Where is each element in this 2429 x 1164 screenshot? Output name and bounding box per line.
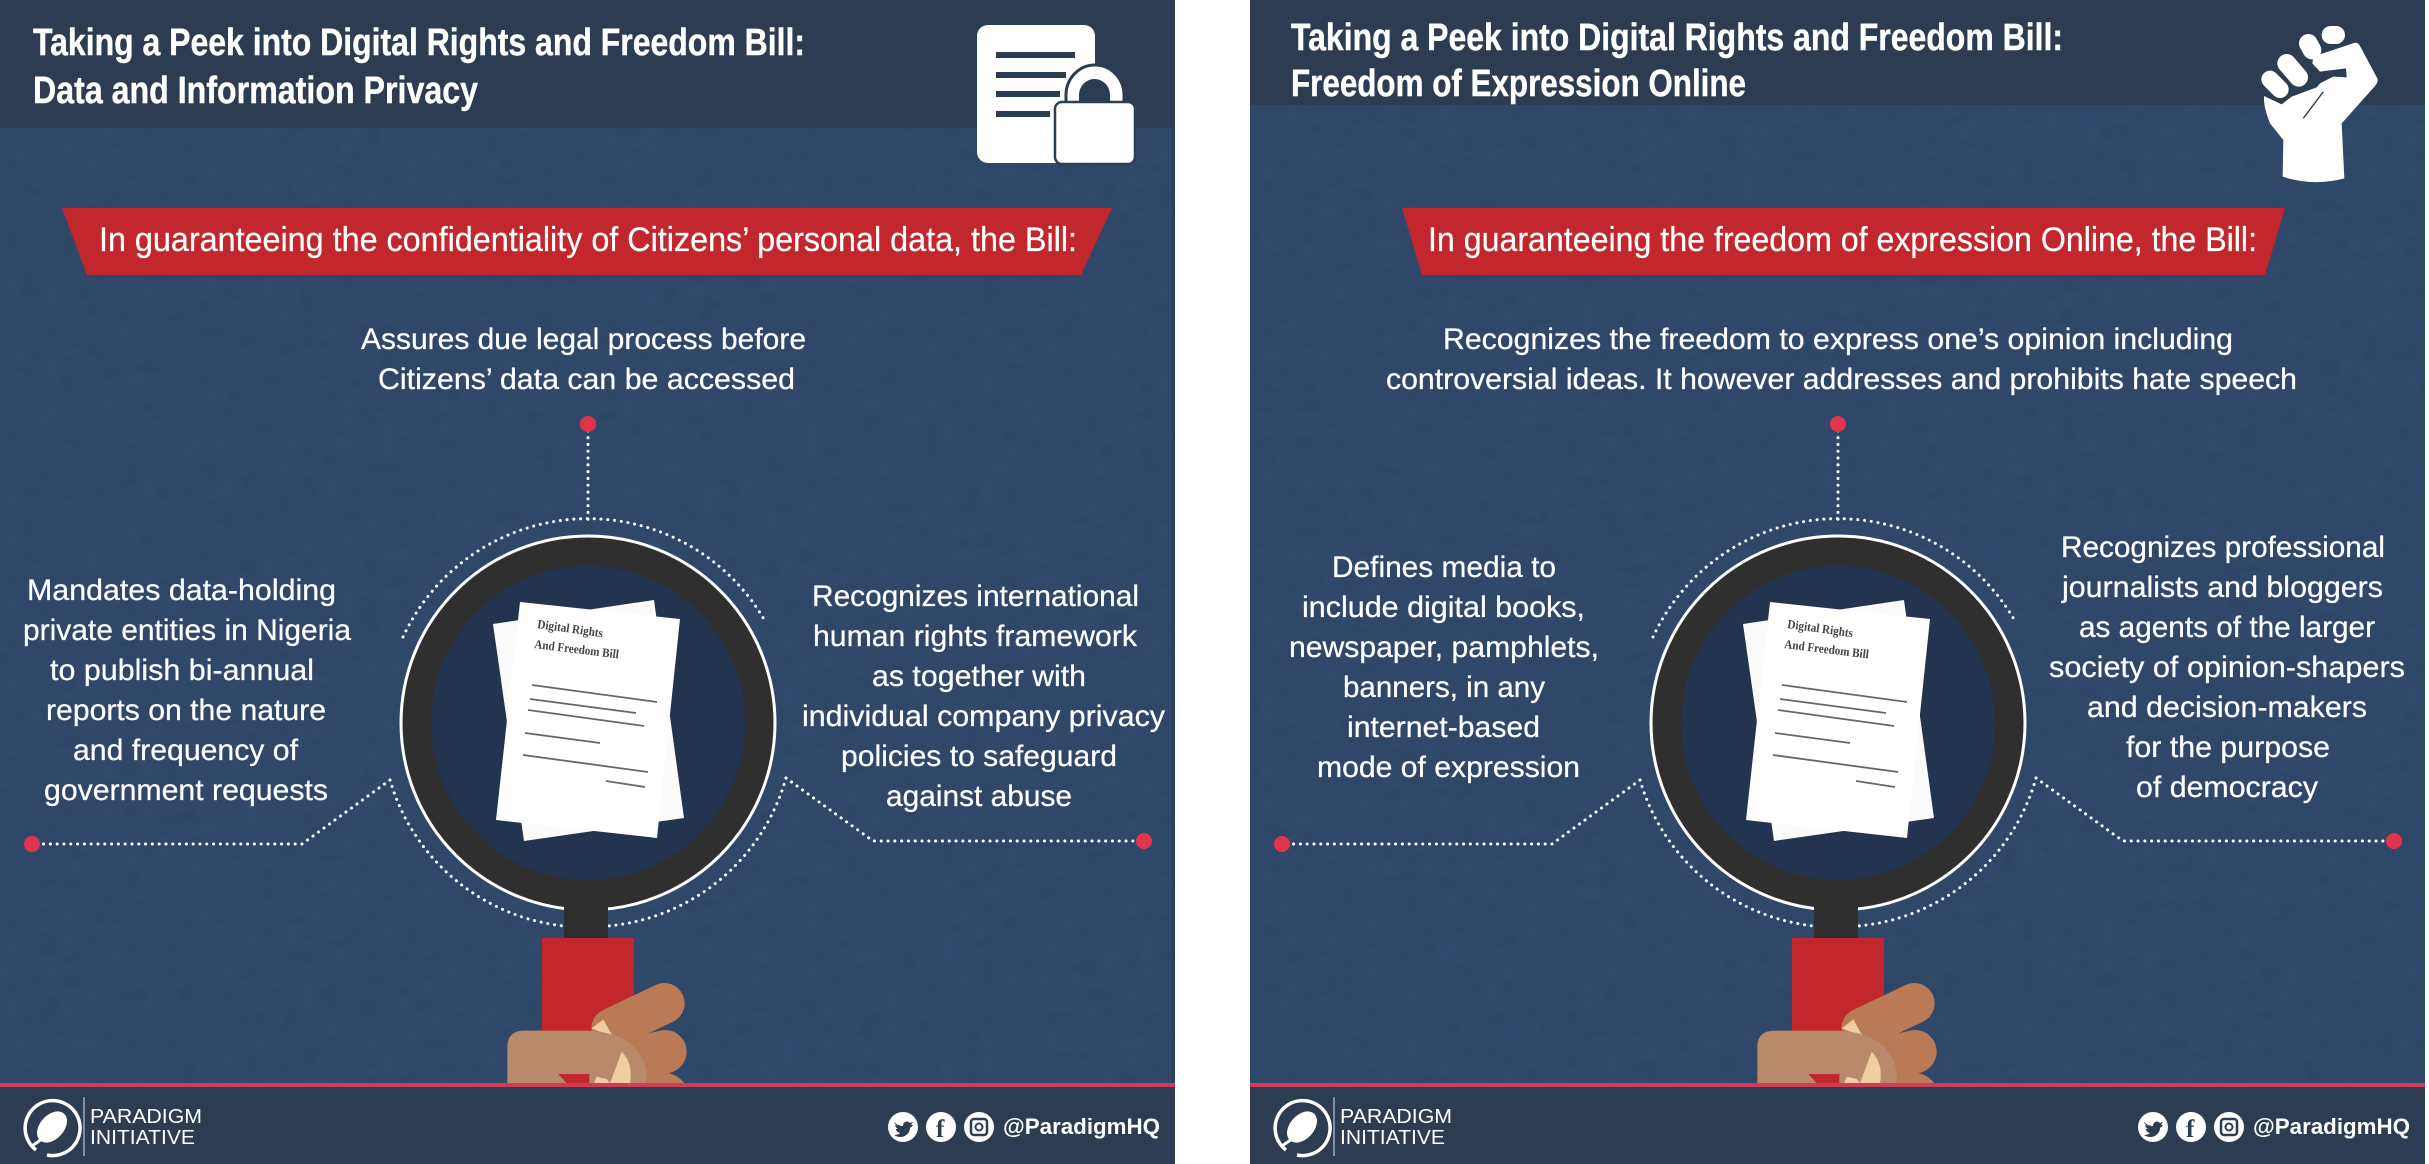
social icons and handle: f (936, 1116, 945, 1143)
paper sheets: And Freedom Bill (1784, 637, 1870, 661)
paper sheets: Digital Rights (1787, 617, 1854, 640)
magnifying glass (401, 536, 775, 1084)
panel: freedom of expression online (1250, 0, 2425, 1164)
logo: Paradigm Initiative: INITIATIVE (90, 1126, 195, 1149)
banner (62, 208, 1112, 275)
paper sheets: Digital Rights (537, 617, 604, 640)
text block: top point: controversial ideas. It however addresses and prohibits hate speech (1386, 363, 2297, 396)
footer bar (1250, 1083, 2425, 1164)
social icons and handle (888, 1112, 1160, 1143)
connectors with dots (1274, 416, 2402, 926)
text block: top point: Citizens’ data can be accessed (378, 363, 795, 396)
title: Data and Information Privacy (33, 70, 478, 112)
text block: right point: for the purpose (2126, 731, 2330, 764)
text block: left point: newspaper, pamphlets, (1289, 631, 1599, 664)
icon: document with padlock (977, 25, 1135, 164)
text block: right point (802, 580, 1165, 813)
text block: left point (1289, 551, 1599, 784)
text block: right point: journalists and bloggers (2061, 571, 2383, 604)
paper sheets (1743, 600, 1934, 841)
text block: left point: include digital books, (1302, 591, 1585, 624)
text block: left point: government requests (44, 774, 328, 807)
title (1291, 17, 2063, 105)
header bar (0, 0, 1175, 128)
paper sheets: And Freedom Bill (534, 637, 620, 661)
title: Taking a Peek into Digital Rights and Freedom Bill: (1291, 17, 2063, 59)
text block: top point (1386, 323, 2297, 396)
text block: right point: and decision-makers (2087, 691, 2367, 724)
text block: left point: Mandates data-holding (27, 574, 336, 607)
title (33, 22, 805, 112)
text block: left point: Defines media to (1332, 551, 1556, 584)
text block: right point: society of opinion-shapers (2049, 651, 2405, 684)
logo: Paradigm Initiative: PARADIGM (1340, 1105, 1452, 1128)
text block: left point: to publish bi-annual (50, 654, 314, 687)
footer bar (0, 1083, 1175, 1164)
logo: Paradigm Initiative: PARADIGM (90, 1105, 202, 1128)
title: Freedom of Expression Online (1291, 63, 1746, 105)
icon: raised fist (2264, 35, 2378, 182)
icon: hand (507, 1003, 684, 1083)
logo: Paradigm Initiative (25, 1097, 202, 1156)
text block: left point: reports on the nature (46, 694, 326, 727)
text block: left point: private entities in Nigeria (23, 614, 351, 647)
magnifying glass (1651, 536, 2025, 1084)
social icons and handle: @ParadigmHQ (1003, 1114, 1160, 1139)
text block: right point: human rights framework (813, 620, 1138, 653)
text block: top point: Assures due legal process before (361, 323, 806, 356)
banner: In guaranteeing the confidentiality of Citizens’ personal data, the Bill: (99, 221, 1077, 259)
text block: left point (23, 574, 351, 807)
social icons and handle: f (2186, 1116, 2195, 1143)
text block: left point: internet-based (1347, 711, 1540, 744)
text block: right point: individual company privacy (802, 700, 1165, 733)
text block: right point: Recognizes international (812, 580, 1139, 613)
text block: top point: Recognizes the freedom to express one’s opinion including (1443, 323, 2233, 356)
text block: right point: of democracy (2136, 771, 2318, 804)
logo: Paradigm Initiative (1275, 1097, 1452, 1156)
logo: Paradigm Initiative: INITIATIVE (1340, 1126, 1445, 1149)
text block: right point: against abuse (886, 780, 1072, 813)
social icons and handle: @ParadigmHQ (2253, 1114, 2410, 1139)
panel: data and information privacy (0, 0, 1175, 1164)
text block: right point: Recognizes professional (2061, 531, 2385, 564)
social icons and handle (2138, 1112, 2410, 1143)
connectors with dots (24, 416, 1152, 926)
icon: hand (1757, 1003, 1934, 1083)
text block: left point: and frequency of (73, 734, 299, 767)
text block: top point (361, 323, 806, 396)
text block: right point: policies to safeguard (841, 740, 1117, 773)
text block: left point: mode of expression (1317, 751, 1580, 784)
text block: right point: as agents of the larger (2079, 611, 2375, 644)
paper sheets (493, 600, 684, 841)
text block: right point: as together with (872, 660, 1086, 693)
text block: left point: banners, in any (1343, 671, 1545, 704)
title: Taking a Peek into Digital Rights and Freedom Bill: (33, 22, 805, 64)
banner: In guaranteeing the freedom of expression Online, the Bill: (1428, 221, 2257, 259)
banner (1402, 208, 2285, 275)
text block: right point (2049, 531, 2405, 804)
header bar (1250, 0, 2425, 105)
